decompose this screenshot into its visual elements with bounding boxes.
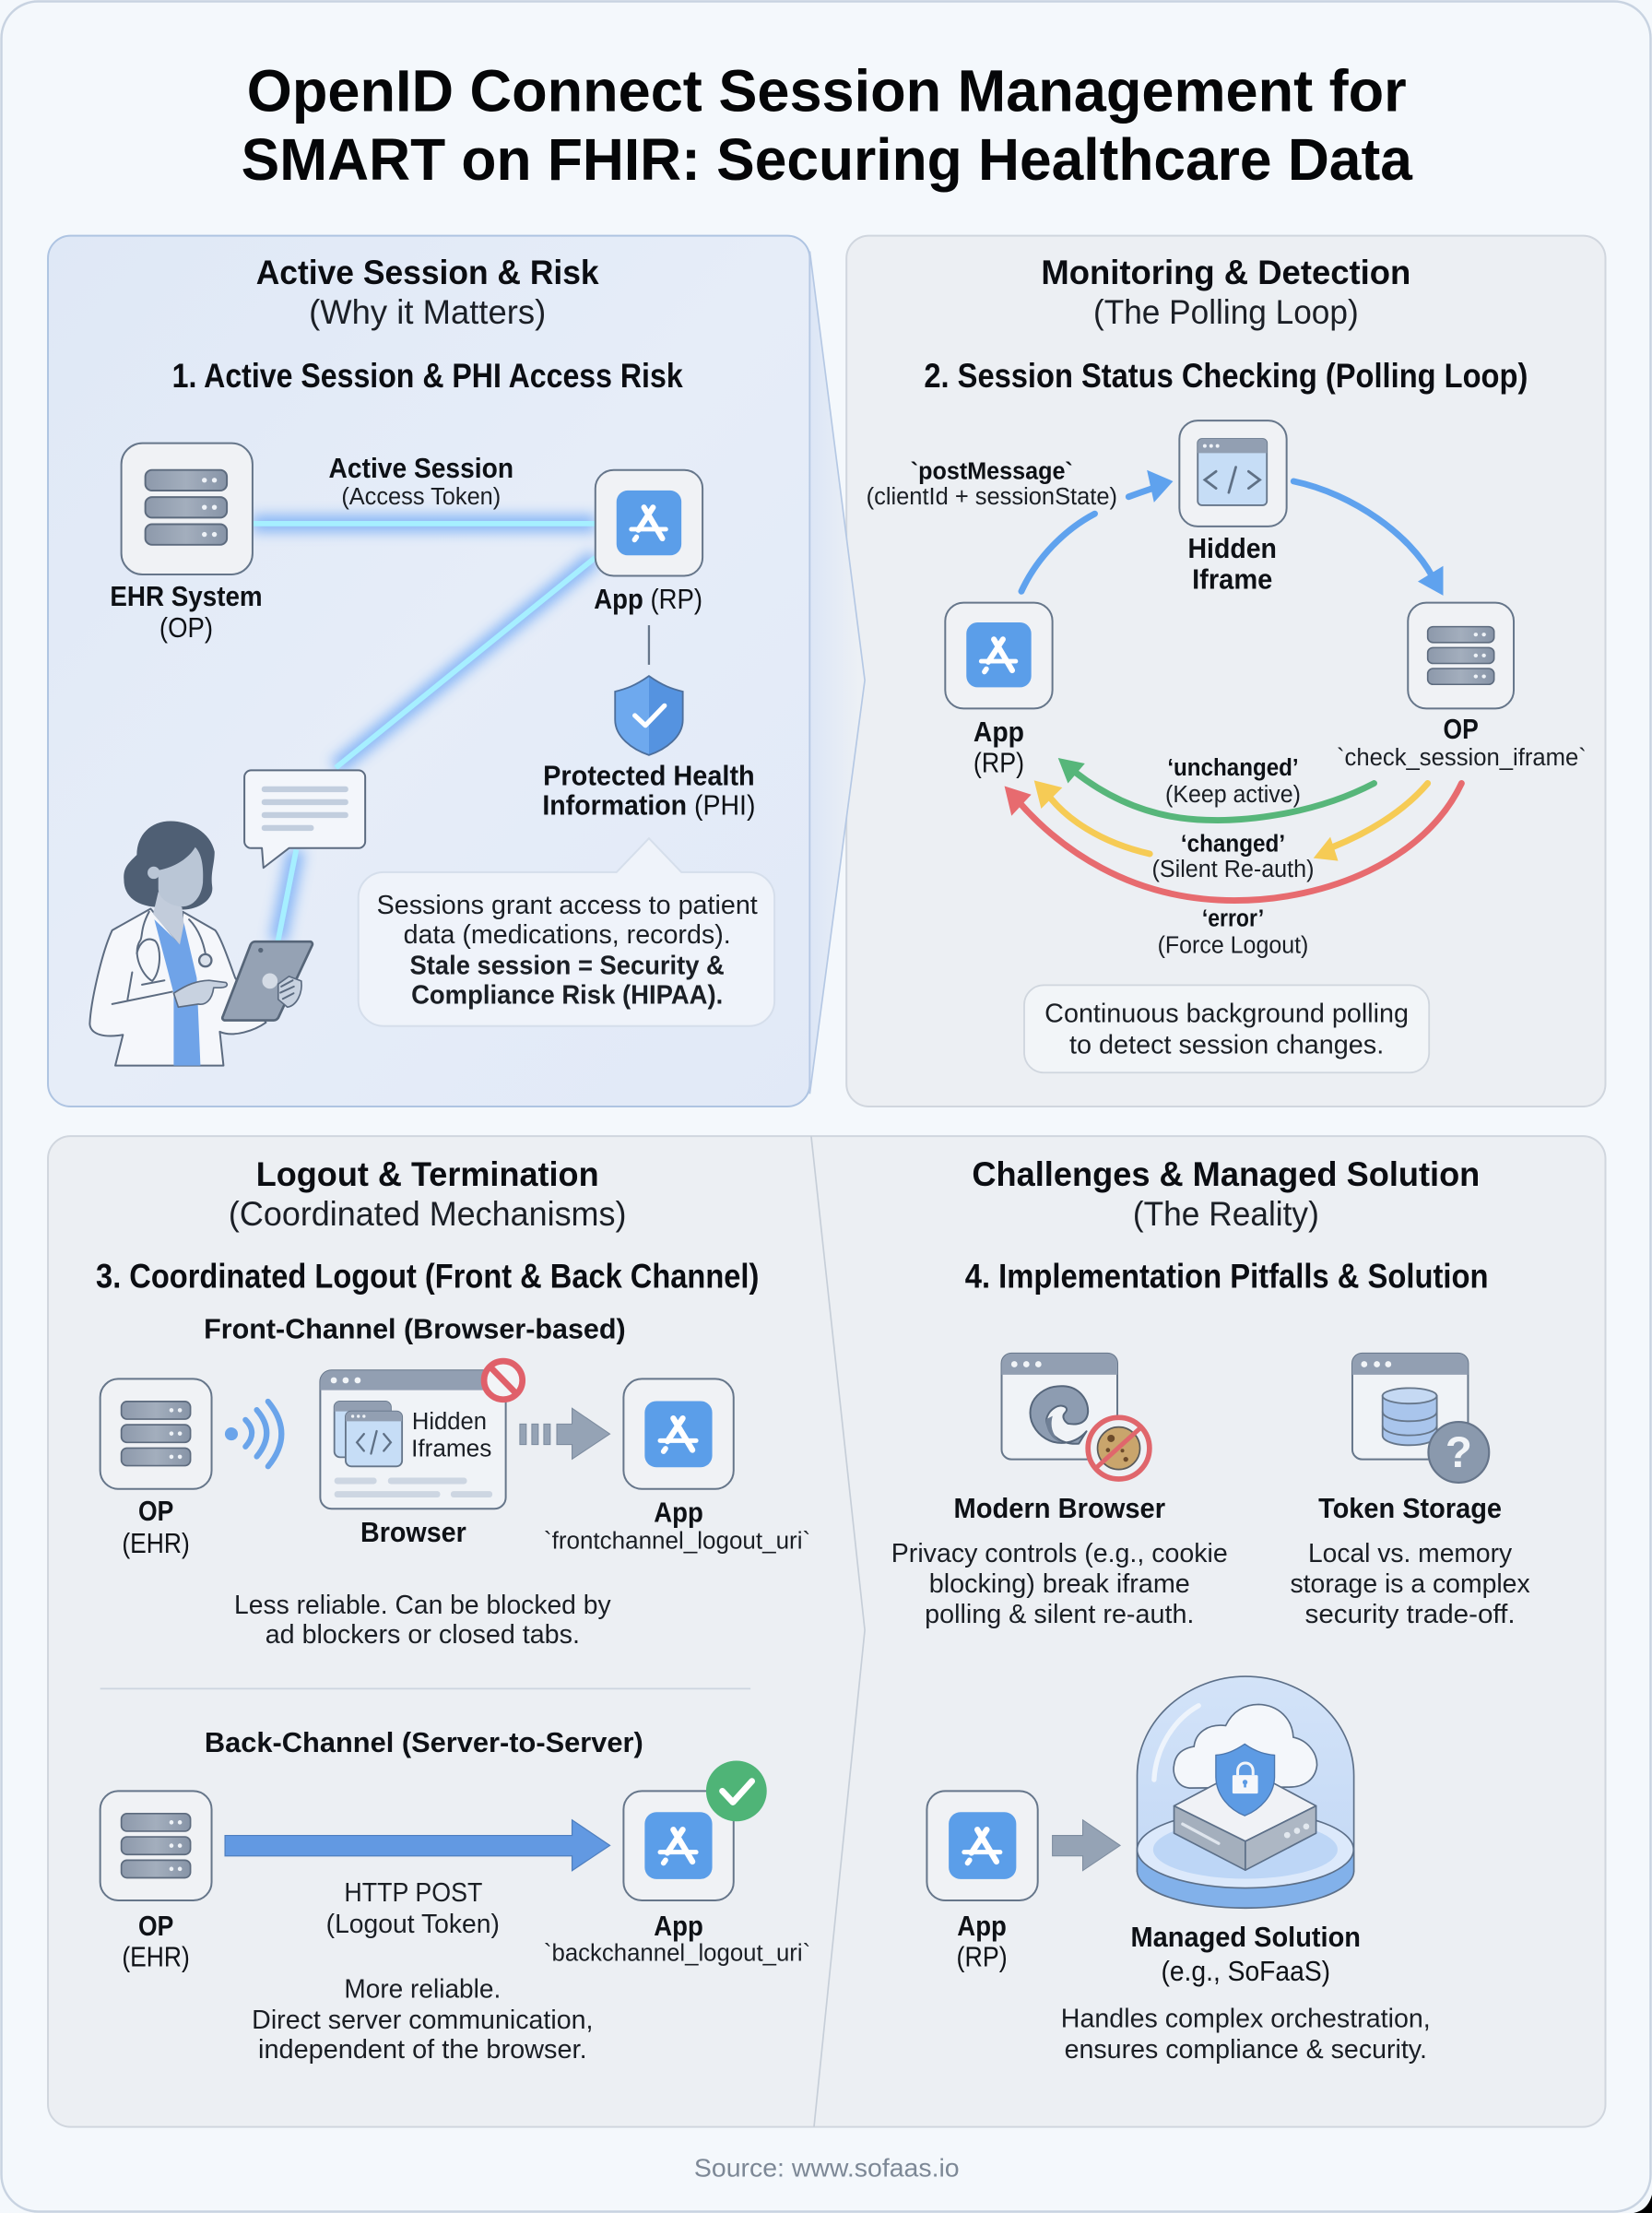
label: PHI: Information (PHI) xyxy=(542,790,755,822)
icon: browser with hidden iframes: Hidden xyxy=(412,1407,487,1435)
panel heading: 3. Coordinated Logout (Front & Back Channel) xyxy=(96,1257,759,1295)
label: app RP xyxy=(957,1911,1008,1973)
label: error: ‘error’ xyxy=(1202,905,1264,932)
label: modern browser: Modern Browser xyxy=(953,1493,1165,1524)
panel heading: Challenges & Managed Solution xyxy=(972,1155,1480,1193)
label: OP EHR xyxy=(122,1496,190,1559)
panel heading: Active Session & Risk xyxy=(256,254,599,291)
label: token storage: Token Storage xyxy=(1318,1493,1502,1524)
arrow: app to iframe xyxy=(1021,470,1173,591)
callout: continuous polling xyxy=(1024,985,1429,1072)
label: managed solution xyxy=(1131,1922,1361,1987)
icon: app with check xyxy=(623,1760,767,1900)
panel heading: Monitoring & Detection xyxy=(1041,254,1410,291)
icon: app xyxy=(926,1791,1038,1900)
text: modern browser note: polling & silent re-auth. xyxy=(925,1600,1194,1629)
label: frontchannel app: `frontchannel_logout_uri` xyxy=(544,1527,810,1555)
heading: front channel: Front-Channel (Browser-based) xyxy=(204,1313,626,1344)
title xyxy=(242,58,1413,193)
label: hidden iframe xyxy=(1188,533,1277,596)
text: token storage note: security trade-off. xyxy=(1305,1600,1516,1629)
icon: app xyxy=(623,1379,734,1489)
panel heading xyxy=(96,1155,759,1295)
label: PHI: Protected Health xyxy=(543,760,755,791)
panel heading: 2. Session Status Checking (Polling Loop) xyxy=(924,357,1528,395)
corner xyxy=(1634,2195,1652,2213)
label: error: (Force Logout) xyxy=(1158,931,1308,959)
text: front channel note: Less reliable. Can be blocked by xyxy=(234,1591,611,1620)
label: EHR system xyxy=(110,581,263,644)
label: postMessage: (clientId + sessionState) xyxy=(867,482,1117,510)
section: coordinated logout xyxy=(96,1155,810,2065)
panel heading: (The Polling Loop) xyxy=(1093,293,1359,331)
label: OP EHR: (EHR) xyxy=(122,1942,190,1973)
connector line xyxy=(648,625,650,665)
label: HTTP POST: HTTP POST xyxy=(344,1878,483,1908)
icon: OP server xyxy=(100,1791,212,1900)
label: error xyxy=(1158,905,1308,959)
arrow: changed response left xyxy=(1034,780,1150,854)
text: managed solution note: Handles complex orchestration, xyxy=(1061,2004,1431,2033)
label: OP EHR: OP xyxy=(138,1496,173,1527)
panel heading xyxy=(172,254,683,395)
label: app RP xyxy=(974,716,1024,779)
panel heading: Logout & Termination xyxy=(256,1155,599,1193)
label: backchannel app: App xyxy=(654,1911,703,1942)
label: hidden iframe: Hidden xyxy=(1188,533,1277,564)
label: OP EHR: (EHR) xyxy=(122,1528,190,1559)
icon: browser with hidden iframes: Iframes xyxy=(411,1434,491,1462)
label: EHR system: EHR System xyxy=(110,581,263,612)
callout: session risk: Sessions grant access to patient xyxy=(377,891,758,920)
panel heading: 1. Active Session & PHI Access Risk xyxy=(172,357,683,395)
illustration: doctor with tablet xyxy=(89,821,313,1066)
section: challenges and solution xyxy=(891,1155,1530,2065)
arrow: error response xyxy=(1005,783,1461,901)
icon: OP server xyxy=(1408,603,1514,708)
icon: hidden iframe xyxy=(1179,420,1287,527)
text: back channel note: Direct server communication, xyxy=(252,2006,593,2035)
label: active session: (Access Token) xyxy=(341,482,501,510)
label: browser: Browser xyxy=(360,1517,466,1548)
label: unchanged: (Keep active) xyxy=(1165,780,1301,808)
label: postMessage xyxy=(867,456,1117,510)
icon: broadcast waves xyxy=(225,1402,281,1466)
text: back channel note: independent of the browser. xyxy=(258,2035,587,2065)
label: changed xyxy=(1152,829,1314,882)
panel heading xyxy=(965,1155,1488,1295)
label: HTTP POST xyxy=(326,1878,500,1939)
arrow: dashed gray xyxy=(520,1408,610,1459)
arrow: iframe to OP xyxy=(1293,481,1444,596)
callout: continuous polling: Continuous background polling xyxy=(1044,1000,1409,1029)
panel heading xyxy=(924,254,1528,395)
label: unchanged: ‘unchanged’ xyxy=(1167,753,1299,781)
panel heading: 4. Implementation Pitfalls & Solution xyxy=(965,1257,1488,1295)
label: HTTP POST: (Logout Token) xyxy=(326,1910,500,1939)
label: OP EHR xyxy=(122,1911,190,1973)
icon: browser with hidden iframes xyxy=(320,1370,506,1509)
label: app RP: (RP) xyxy=(957,1942,1008,1973)
callout: session risk: data (medications, records). xyxy=(404,920,731,950)
panel heading: (The Reality) xyxy=(1133,1195,1319,1233)
arrow: unchanged response xyxy=(1058,758,1375,820)
label: changed: (Silent Re-auth) xyxy=(1152,855,1314,882)
source footer: Source: www.sofaas.io xyxy=(694,2154,960,2183)
text: back channel note xyxy=(252,1974,593,2065)
label: app RP: App (RP) xyxy=(594,584,702,615)
text: front channel note: ad blockers or closed tabs. xyxy=(266,1620,580,1650)
label: app RP: App xyxy=(974,716,1024,748)
label: frontchannel app: App xyxy=(654,1497,703,1528)
icon: chat bubble xyxy=(244,770,365,868)
text: token storage note xyxy=(1290,1539,1530,1629)
chevron pointing to next panel xyxy=(809,251,865,1094)
icon: app xyxy=(596,470,702,575)
heading: back channel: Back-Channel (Server-to-Server) xyxy=(205,1727,643,1758)
icon: OP server xyxy=(100,1379,212,1489)
text: token storage note: Local vs. memory xyxy=(1308,1539,1513,1568)
text: managed solution note: ensures compliance & security. xyxy=(1065,2035,1427,2065)
icon: EHR server xyxy=(122,444,253,574)
panel: monitoring and detection xyxy=(846,236,1605,1106)
icon: shield xyxy=(615,676,683,755)
label: OP check_session_iframe: `check_session_iframe` xyxy=(1337,743,1587,771)
title: SMART on FHIR: Securing Healthcare Data xyxy=(242,126,1413,193)
title: OpenID Connect Session Management for xyxy=(247,58,1407,124)
label: backchannel app: `backchannel_logout_uri` xyxy=(544,1938,810,1966)
label: backchannel app xyxy=(544,1911,810,1966)
label: PHI xyxy=(542,760,755,822)
text: token storage note: storage is a complex xyxy=(1290,1569,1530,1599)
callout: session risk: Stale session = Security & xyxy=(410,952,725,981)
label: OP check_session_iframe xyxy=(1337,714,1587,771)
label: managed solution: (e.g., SoFaaS) xyxy=(1161,1956,1330,1987)
label: unchanged xyxy=(1165,753,1301,808)
text: modern browser note: blocking) break iframe xyxy=(929,1569,1190,1599)
callout: session risk: Compliance Risk (HIPAA). xyxy=(411,981,723,1011)
icon: blocked sign xyxy=(484,1361,523,1400)
icon: modern browser with cookie block xyxy=(1002,1354,1150,1479)
label: changed: ‘changed’ xyxy=(1181,829,1285,857)
callout: continuous polling: to detect session changes. xyxy=(1069,1030,1384,1059)
text: managed solution note xyxy=(1061,2004,1431,2065)
text: modern browser note: Privacy controls (e.g., cookie xyxy=(891,1539,1228,1568)
glowing session connection lines xyxy=(253,524,596,941)
label: app RP: App xyxy=(957,1911,1007,1942)
panel: active session and risk xyxy=(48,236,865,1106)
label: OP check_session_iframe: OP xyxy=(1444,714,1479,745)
arrow: to managed solution xyxy=(1053,1820,1120,1871)
label: active session: Active Session xyxy=(329,453,513,484)
label: active session xyxy=(329,453,513,510)
callout: session risk xyxy=(359,838,774,1026)
text: front channel note xyxy=(234,1591,611,1650)
icon: app xyxy=(945,603,1053,708)
text: modern browser note xyxy=(891,1539,1228,1629)
arrow: changed response right xyxy=(1314,783,1428,861)
label: managed solution: Managed Solution xyxy=(1131,1922,1361,1953)
label: OP EHR: OP xyxy=(138,1911,173,1942)
arrow: HTTP POST xyxy=(225,1820,610,1871)
panel heading: (Why it Matters) xyxy=(309,293,546,331)
panel: logout and challenges xyxy=(48,1136,1605,2127)
label: hidden iframe: Iframe xyxy=(1192,564,1272,596)
illustration: managed solution dome xyxy=(1138,1676,1354,1908)
label: app RP: (RP) xyxy=(974,748,1024,779)
label: EHR system: (OP) xyxy=(159,612,213,644)
icon: token storage xyxy=(1352,1354,1489,1483)
label: postMessage: `postMessage` xyxy=(911,456,1073,484)
panel heading: (Coordinated Mechanisms) xyxy=(229,1195,626,1233)
text: back channel note: More reliable. xyxy=(344,1974,501,2004)
label: frontchannel app xyxy=(544,1497,810,1555)
icon: token storage: ? xyxy=(1446,1428,1472,1477)
